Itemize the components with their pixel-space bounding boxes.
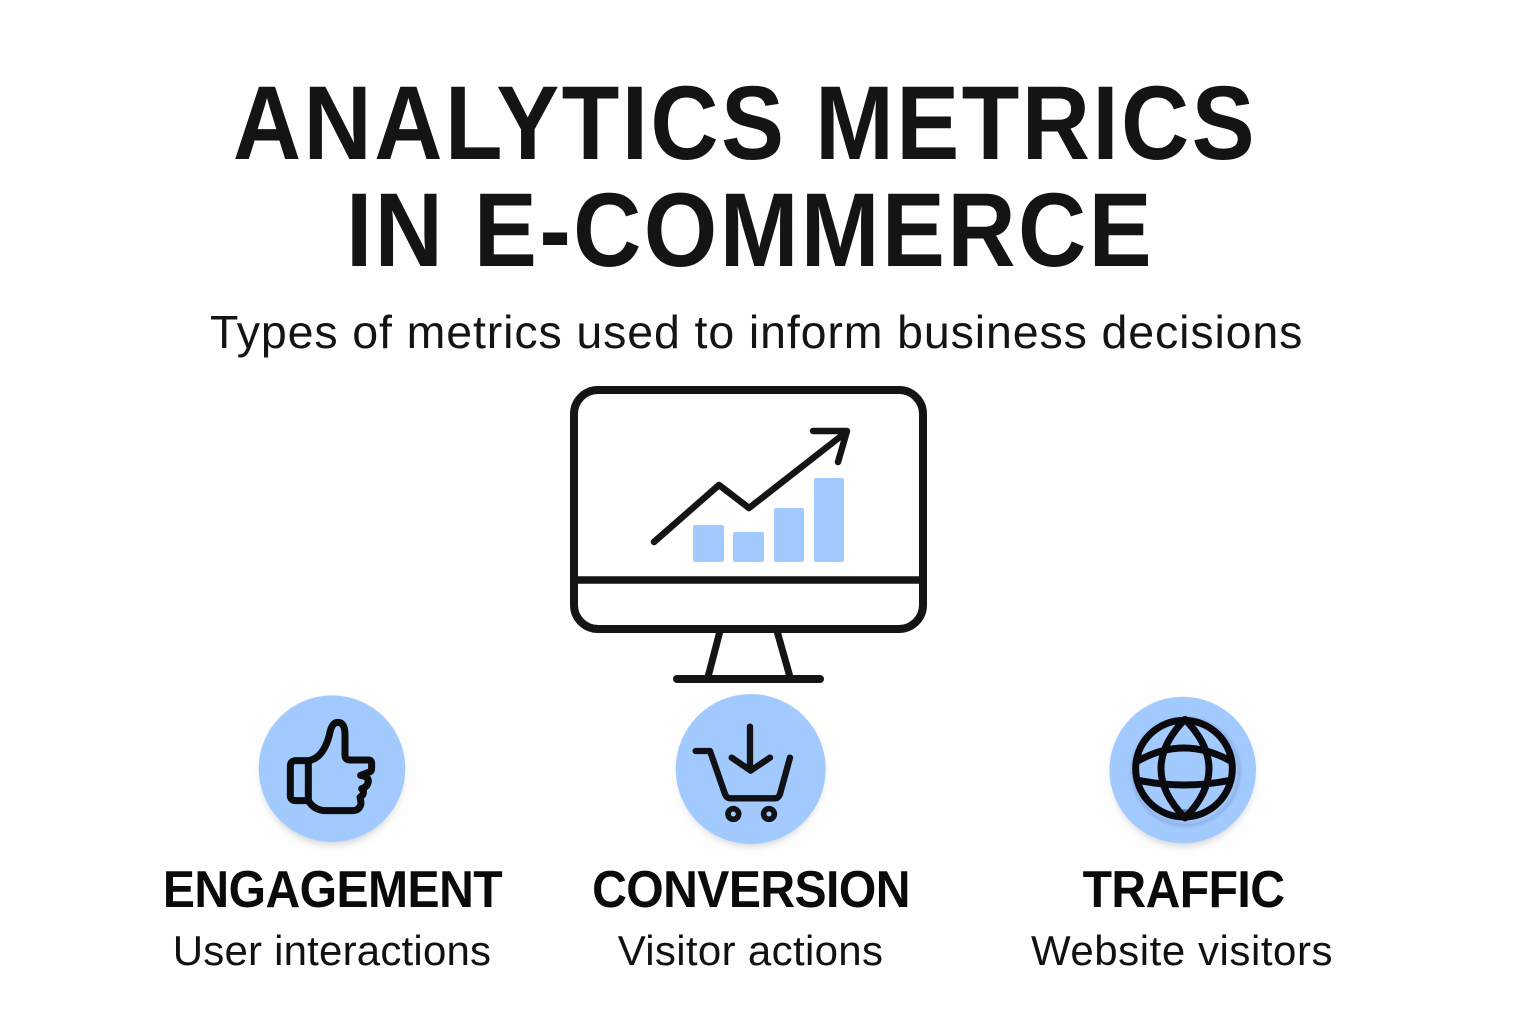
text: website visitors: Website visitors xyxy=(1031,926,1333,974)
heading: traffic: TRAFFIC xyxy=(1083,861,1284,919)
text: user interactions: User interactions xyxy=(173,926,491,974)
icon: globe xyxy=(1109,696,1256,850)
panel: traffic xyxy=(1031,696,1333,974)
panel: conversion xyxy=(592,694,910,974)
title: IN E-COMMERCE xyxy=(345,172,1154,289)
subtitle: Types of metrics used to inform business decisions xyxy=(210,306,1303,358)
icon: monitor with growth chart xyxy=(570,386,927,683)
heading: conversion: CONVERSION xyxy=(592,861,910,919)
icon: cart with download arrow xyxy=(676,694,826,850)
heading: engagement: ENGAGEMENT xyxy=(163,861,502,919)
icon: thumbs up xyxy=(258,695,406,848)
text: visitor actions: Visitor actions xyxy=(618,926,883,974)
panel: engagement xyxy=(163,695,502,974)
title xyxy=(232,65,1257,289)
title: ANALYTICS METRICS xyxy=(232,65,1257,182)
